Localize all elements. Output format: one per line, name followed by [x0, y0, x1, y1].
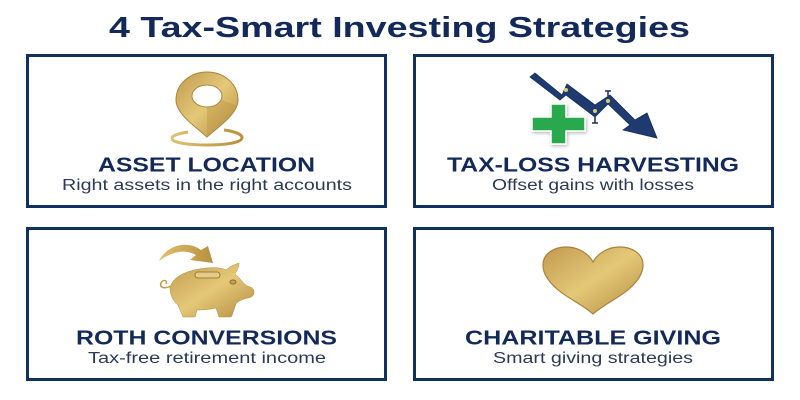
- panel: charitable giving: [414, 228, 772, 380]
- icon: pig body: [170, 263, 254, 317]
- icon: coin slot: [195, 272, 220, 278]
- text: tax-loss harvesting description: Offset gains with losses: [492, 177, 694, 194]
- arrow: gold curved arrow: [159, 245, 213, 263]
- icon: gold heart: [543, 247, 643, 314]
- icon: gold piggy bank: [159, 245, 254, 317]
- icon: falling arrow with green plus: [530, 73, 657, 144]
- heading: tax-loss harvesting: TAX-LOSS HARVESTING: [447, 154, 739, 176]
- icon: gold map pin: [172, 72, 242, 145]
- icon: green plus: [532, 104, 585, 144]
- panel: tax-loss harvesting: [414, 56, 772, 206]
- title: 4 Tax-Smart Investing Strategies: [109, 12, 690, 44]
- heading: asset location: ASSET LOCATION: [98, 154, 315, 176]
- heading: charitable giving: CHARITABLE GIVING: [465, 326, 721, 350]
- text: charitable giving description: Smart giving strategies: [493, 350, 693, 367]
- panel: roth conversions: [28, 228, 386, 380]
- panel: asset location: [28, 56, 386, 206]
- heading: roth conversions: ROTH CONVERSIONS: [76, 326, 337, 350]
- icon: pig tail: [161, 280, 171, 288]
- arrow: falling navy line: [530, 73, 657, 138]
- icon: pig eye: [230, 280, 236, 284]
- text: roth conversions description: Tax-free retirement income: [88, 350, 326, 367]
- text: asset location description: Right assets in the right accounts: [62, 177, 352, 194]
